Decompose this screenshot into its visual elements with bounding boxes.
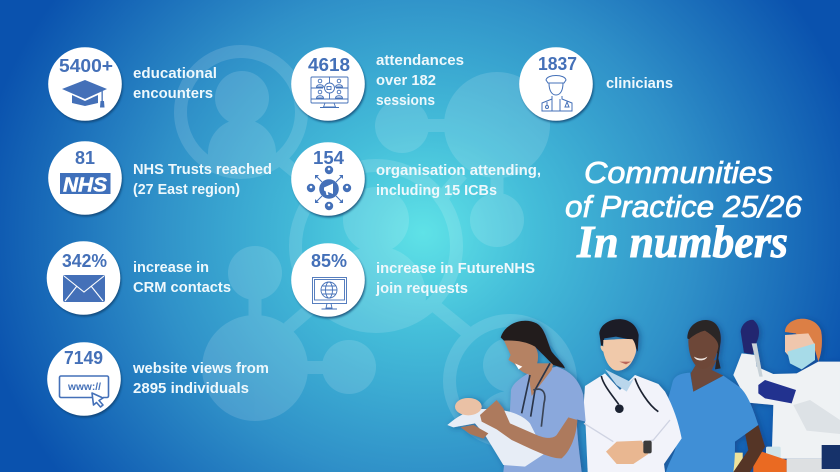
- icon: browser address: www://: [67, 382, 101, 393]
- icon: graduation cap: [62, 80, 107, 108]
- icon: envelope: [63, 275, 105, 302]
- label: join requests: [375, 281, 468, 297]
- label: increase in: [133, 260, 209, 276]
- label: CRM contacts: [133, 280, 231, 296]
- label: including 15 ICBs: [376, 183, 497, 199]
- number: 85%: 85%: [311, 251, 347, 271]
- label: over 182: [376, 73, 436, 89]
- icon: video call monitor: [311, 77, 348, 108]
- number: 81: 81: [75, 148, 95, 168]
- stat: NHS trusts: [48, 141, 272, 216]
- icon: globe monitor: [312, 278, 346, 309]
- label: website views from: [132, 361, 269, 377]
- label: increase in FutureNHS: [376, 261, 535, 277]
- number: 5400+: 5400+: [59, 56, 113, 76]
- label: clinicians: [606, 76, 673, 92]
- number: 154: 154: [313, 148, 344, 168]
- label: encounters: [133, 86, 213, 102]
- label: 2895 individuals: [133, 381, 249, 397]
- title: In numbers: [576, 216, 788, 267]
- title: of Practice 25/26: [565, 189, 803, 224]
- title: [565, 155, 803, 267]
- label: sessions: [376, 93, 435, 109]
- icon: clinician: [542, 76, 572, 111]
- stat: organisations: [291, 142, 541, 218]
- photo: four healthcare workers: [447, 319, 840, 472]
- lab scientist: [731, 319, 840, 472]
- number: 4618: 4618: [308, 55, 350, 75]
- icon: browser address: [60, 376, 108, 407]
- icon: NHS logo: NHS: [63, 174, 108, 196]
- label: NHS Trusts reached: [133, 162, 272, 178]
- label: organisation attending,: [376, 163, 541, 179]
- title: Communities: [584, 155, 773, 190]
- icon: megaphone network: [307, 166, 351, 210]
- nurse holding baby: [447, 321, 586, 472]
- stat: website views: [47, 342, 269, 418]
- stat: clinicians: [519, 47, 673, 123]
- nurse in blue scrubs: [666, 320, 765, 472]
- stat: CRM contacts: [47, 241, 231, 316]
- doctor in white coat: [583, 319, 682, 472]
- stat: attendances: [291, 47, 464, 123]
- label: educational: [133, 66, 217, 82]
- stat: FutureNHS requests: [291, 243, 535, 318]
- label: (27 East region): [133, 182, 240, 198]
- number: 342%: 342%: [62, 251, 107, 271]
- number: 7149: 7149: [64, 348, 103, 368]
- network watermark: [180, 52, 570, 459]
- stat: educational encounters: [48, 47, 217, 123]
- label: attendances: [376, 53, 464, 69]
- number: 1837: 1837: [538, 54, 577, 74]
